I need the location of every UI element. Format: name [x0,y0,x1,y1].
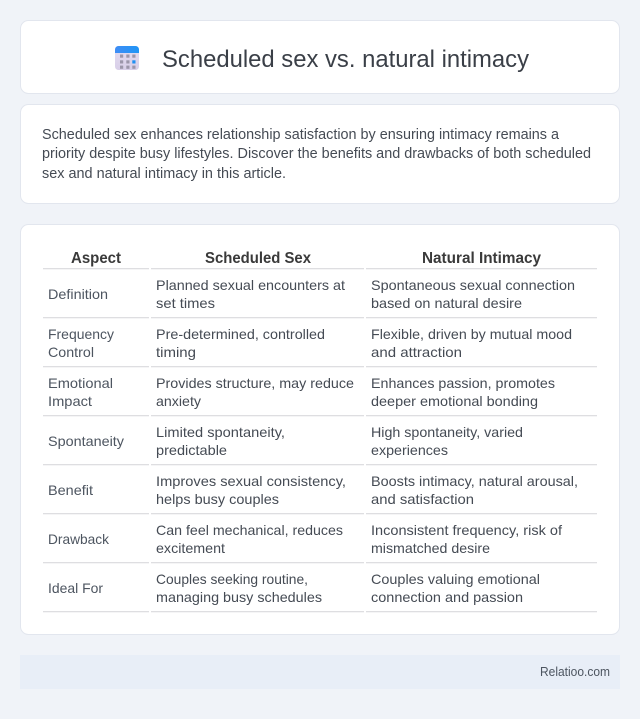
row: frequency control: Pre-determined, controlled [156,326,325,342]
footer: Relatioo.com [540,665,610,679]
row: spontaneity [48,424,523,458]
text block: intro [42,127,591,182]
row: emotional impact: Impact [48,393,92,409]
row: ideal for [48,571,540,605]
row: emotional impact: Emotional [48,375,113,391]
row: emotional impact: Enhances passion, promotes [371,375,555,391]
table header row: Scheduled Sex [205,250,311,267]
row: benefit: Benefit [48,482,93,498]
row: frequency control: and attraction [371,344,462,360]
row: frequency control [48,326,572,360]
row: emotional impact [48,375,555,409]
row: emotional impact: anxiety [156,393,201,409]
row: spontaneity: Spontaneity [48,433,124,449]
row: ideal for: managing busy schedules [156,589,322,605]
text block: intro: priority despite busy lifestyles. Discover the benefits and drawbacks of both scheduled [42,146,591,162]
row: spontaneity: High spontaneity, varied [371,424,523,440]
row: benefit: Improves sexual consistency, [156,473,346,489]
row: drawback: excitement [156,540,225,556]
table header row: Aspect [71,250,122,267]
title: Scheduled sex vs. natural intimacy [162,46,529,73]
panel: intro card [20,104,620,204]
row: benefit: helps busy couples [156,491,279,507]
row: frequency control: Flexible, driven by mutual mood [371,326,572,342]
panel: header card [20,20,620,94]
table header row [71,250,541,267]
row: definition: set times [156,295,215,311]
row: benefit: and satisfaction [371,491,474,507]
table header row: Natural Intimacy [422,250,541,267]
row: spontaneity: predictable [156,442,227,458]
row: frequency control: Control [48,344,94,360]
row: frequency control: timing [156,344,196,360]
row: drawback: mismatched desire [371,540,490,556]
row: definition [48,277,575,311]
row: spontaneity: Limited spontaneity, [156,424,285,440]
row: benefit [48,473,578,507]
row: ideal for: connection and passion [371,589,523,605]
icon: calendar [115,46,139,70]
row: definition: based on natural desire [371,295,522,311]
row: drawback [48,522,562,556]
footer [20,655,620,689]
row: definition: Definition [48,286,108,302]
text block: intro: Scheduled sex enhances relationship satisfaction by ensuring intimacy remains a [42,127,559,143]
row: spontaneity: experiences [371,442,448,458]
row: frequency control: Frequency [48,326,114,342]
row: emotional impact: Provides structure, may reduce [156,375,354,391]
row: ideal for: Couples valuing emotional [371,571,540,587]
row: benefit: Boosts intimacy, natural arousal, [371,473,578,489]
panel: comparison table [20,224,620,634]
row: drawback: Inconsistent frequency, risk of [371,522,562,538]
row: definition: Spontaneous sexual connection [371,277,575,293]
row: emotional impact: deeper emotional bonding [371,393,538,409]
row: drawback: Drawback [48,531,110,547]
row: ideal for: Couples seeking routine, [156,571,308,587]
row: definition: Planned sexual encounters at [156,277,345,293]
text block: intro: sex and natural intimacy in this article. [42,166,286,182]
row: ideal for: Ideal For [48,580,103,596]
row: drawback: Can feel mechanical, reduces [156,522,343,538]
